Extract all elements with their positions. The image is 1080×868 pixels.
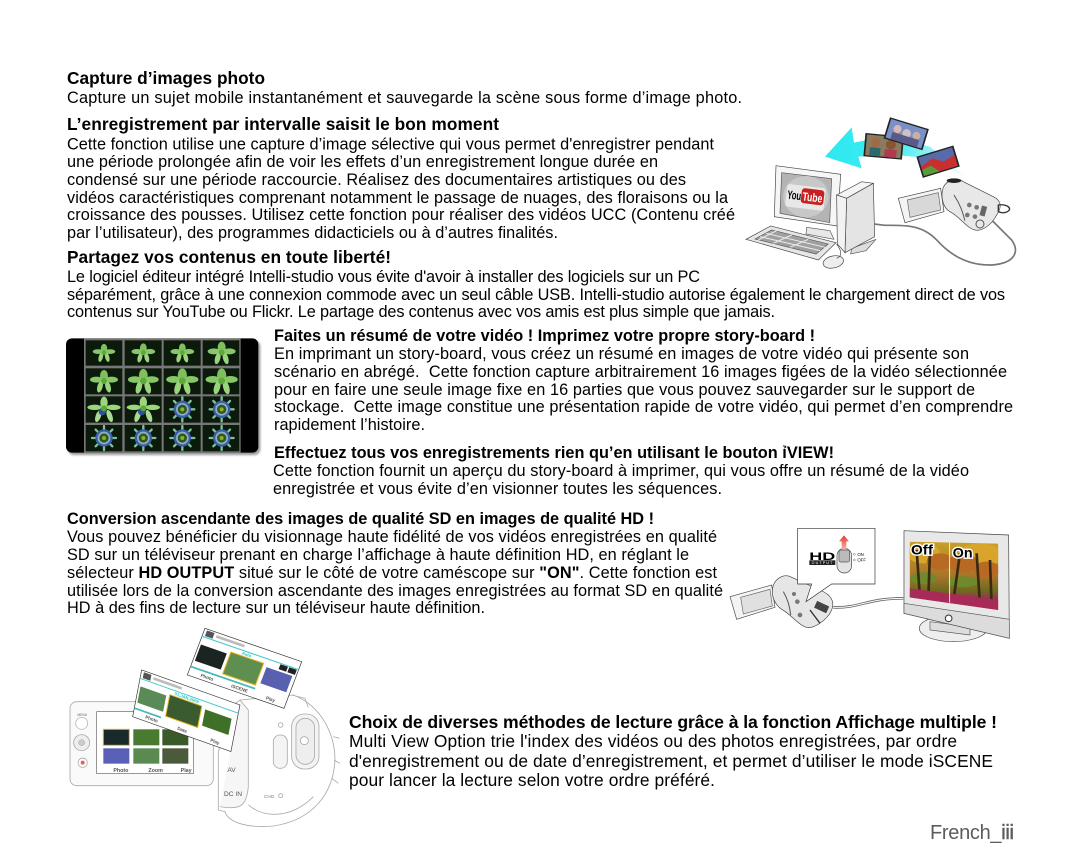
- text: conversion description: HD à des fins de lecture sur un téléviseur haute définition.: [67, 599, 485, 617]
- callout: HD output switch: [798, 528, 875, 602]
- illustration: camcorder connected to HD TV: [730, 528, 1009, 642]
- usb cable: [874, 215, 1015, 265]
- text: interval description: croissance des pousses. Utilisez cette fonction pour réaliser des vidéos UCC (Contenu créé: [67, 206, 735, 224]
- switch labels: [853, 552, 866, 563]
- text: sharing description: Le logiciel éditeur intégré Intelli-studio vous évite d'avoir à installer des logiciels sur un PC: [67, 268, 700, 286]
- menu screen: thumbnails: Zoom: [148, 768, 163, 774]
- text: sharing description: séparément, grâce à une connexion commode avec un seul câble USB. Intelli-studio autorise également le chargement direct de vos: [67, 286, 1005, 304]
- heading: partagez vos contenus: Partagez vos contenus en toute liberté!: [67, 247, 391, 267]
- illustration: camcorder with multi-view screens: [70, 628, 340, 827]
- card: date view: 01.JAN.2009: [174, 691, 200, 705]
- card: iscene view: iSCENE: [230, 683, 249, 694]
- text: multi view description: pour lancer la lecture selon votre ordre préféré.: [349, 770, 715, 790]
- jack labels: AV: [227, 767, 236, 774]
- jack labels: [224, 767, 275, 799]
- heading: capture d'images photo: Capture d’images photo: [67, 68, 265, 88]
- lcd panel: [70, 702, 213, 786]
- lcd panel: MENU: [77, 713, 88, 717]
- camcorder: [730, 576, 833, 628]
- label: off: Off: [911, 542, 933, 558]
- text: sharing description: contenus sur YouTube ou Flickr. Le partage des contenus avec vos amis est plus simple que jamais.: [67, 303, 775, 321]
- page number: French_iii: [930, 822, 1014, 844]
- section: partagez vos contenus: [67, 247, 1005, 321]
- text: multi view description: d'enregistrement ou de date d’enregistrement, et permet d’utiliser le mode iSCENE: [349, 751, 993, 771]
- text: interval description: condensé sur une période raccourcie. Réalisez des documentaires artistiques ou des: [67, 171, 686, 189]
- computer tower: [837, 182, 876, 254]
- jack labels: CHG: [264, 794, 275, 799]
- text: story-board description: pour en faire une seule image fixe en 16 parties que vous pouvez sauvegarder sur le support de: [274, 381, 975, 399]
- menu screen: thumbnails: Photo: [113, 768, 129, 774]
- text: sharing description: [67, 268, 1005, 321]
- text: story-board description: [274, 345, 1013, 434]
- card: date view: Date: [177, 726, 188, 734]
- youtube logo: You: [786, 188, 802, 203]
- text: iVIEW description: Cette fonction fournit un aperçu du story-board à imprimer, qui vous offre un résumé de la vidéo: [273, 462, 969, 480]
- monitor with YouTube screen: [774, 166, 841, 239]
- section: affichage multiple: [349, 712, 997, 790]
- card: iscene view: Auto: [241, 651, 253, 659]
- hdmi cable: [833, 598, 903, 607]
- text: conversion description: [67, 528, 723, 617]
- section: résumé et story-board: [274, 327, 1013, 434]
- tv picture: [907, 542, 1003, 610]
- text: iVIEW description: enregistrée et vous évite d’en visionner toutes les séquences.: [273, 480, 722, 498]
- heading: conversion SD to HD: Conversion ascendante des images de qualité SD en images de qualité HD !: [67, 510, 654, 528]
- text: iVIEW description: [273, 462, 969, 498]
- section: capture d'images photo: [67, 68, 742, 107]
- text: conversion description: sélecteur HD OUTPUT situé sur le côté de votre caméscope sur "ON". Cette fonction est: [67, 564, 717, 582]
- text: interval description: Cette fonction utilise une capture d’image sélective qui vous permet d'enregistrer pendant: [67, 136, 714, 154]
- hd output logo: OUTPUT: [812, 561, 833, 565]
- jack labels: DC IN: [224, 791, 242, 798]
- text: interval description: une période prolongée afin de voir les effets d’un enregistrement longue durée en: [67, 153, 658, 171]
- menu screen: thumbnails: [97, 712, 193, 774]
- youtube logo: Tube: [802, 189, 823, 206]
- section: enregistrement par intervalle: [67, 114, 735, 242]
- keyboard: [746, 226, 836, 260]
- section: iVIEW: [273, 444, 969, 498]
- text: story-board description: stockage. Cette image constitue une présentation rapide de votre vidéo, qui permet d’en comprendre: [274, 398, 1013, 416]
- card: date view: Photo: [145, 714, 158, 724]
- text: interval description: [67, 136, 735, 242]
- heading: enregistrement par intervalle: L’enregistrement par intervalle saisit le bon moment: [67, 114, 499, 134]
- switch labels: OFF: [857, 558, 866, 563]
- menu screen: thumbnails: Play: [181, 768, 192, 774]
- card: iscene view: Play: [265, 695, 276, 703]
- text: multi view description: [349, 731, 993, 790]
- switch: [837, 535, 852, 573]
- mouse: [822, 244, 845, 270]
- camcorder body: [218, 695, 340, 827]
- hd output logo: HD: [809, 551, 835, 563]
- photo: family: [863, 133, 904, 160]
- heading: affichage multiple: Choix de diverses méthodes de lecture grâce à la fonction Affichage multiple !: [349, 712, 997, 732]
- photo: flowers: [916, 145, 960, 178]
- hd output logo: [809, 551, 835, 565]
- text: capture description: Capture un sujet mobile instantanément et sauvegarde la scène sous forme d’image photo.: [67, 89, 742, 107]
- card: iscene view: [187, 628, 302, 708]
- tv: [904, 531, 1009, 642]
- text: interval description: vidéos caractéristiques comprenant notamment le passage de nuages, des floraisons ou la: [67, 189, 729, 207]
- image: storyboard of flower in 16 frames: [66, 338, 260, 455]
- text: story-board description: En imprimant un story-board, vous créez un résumé en images de votre vidéo qui présente son: [274, 345, 969, 363]
- switch labels: ON: [857, 552, 864, 557]
- illustration: computer connected to camcorder: [746, 117, 1015, 270]
- text: conversion description: Vous pouvez bénéficier du visionnage haute fidélité de vos vidéos enregistrées en qualité: [67, 528, 717, 546]
- text: multi view description: Multi View Option trie l'index des vidéos ou des photos enregistrées, par ordre: [349, 731, 957, 751]
- camcorder: [898, 178, 1010, 230]
- section: conversion ascendante: [67, 510, 723, 617]
- label: on: On: [953, 545, 973, 561]
- card: iscene view: Photo: [200, 673, 214, 682]
- youtube logo: [785, 184, 826, 211]
- card: date view: [133, 670, 240, 752]
- text: conversion description: SD sur un téléviseur prenant en charge l’affichage à haute définition HD, en réglant le: [67, 546, 689, 564]
- text: story-board description: rapidement l’histoire.: [274, 416, 425, 434]
- arrow: cyan upload arrow: [825, 127, 970, 180]
- photo: children: [884, 117, 929, 150]
- text: conversion description: utilisée lors de la conversion ascendante des images enregistrées au format SD en qualité: [67, 582, 723, 600]
- heading: story-board: Faites un résumé de votre vidéo ! Imprimez votre propre story-board !: [274, 327, 815, 345]
- heading: iVIEW: Effectuez tous vos enregistrements rien qu’en utilisant le bouton ỉVIEW!: [274, 444, 834, 462]
- card: date view: Play: [210, 737, 220, 746]
- text: story-board description: scénario en abrégé. Cette fonction capture arbitrairement 16 images figées de la vidéo sélectionnée: [274, 363, 1007, 381]
- text: interval description: par l’utilisateur), des programmes didacticiels ou à d’autres finalités.: [67, 224, 558, 242]
